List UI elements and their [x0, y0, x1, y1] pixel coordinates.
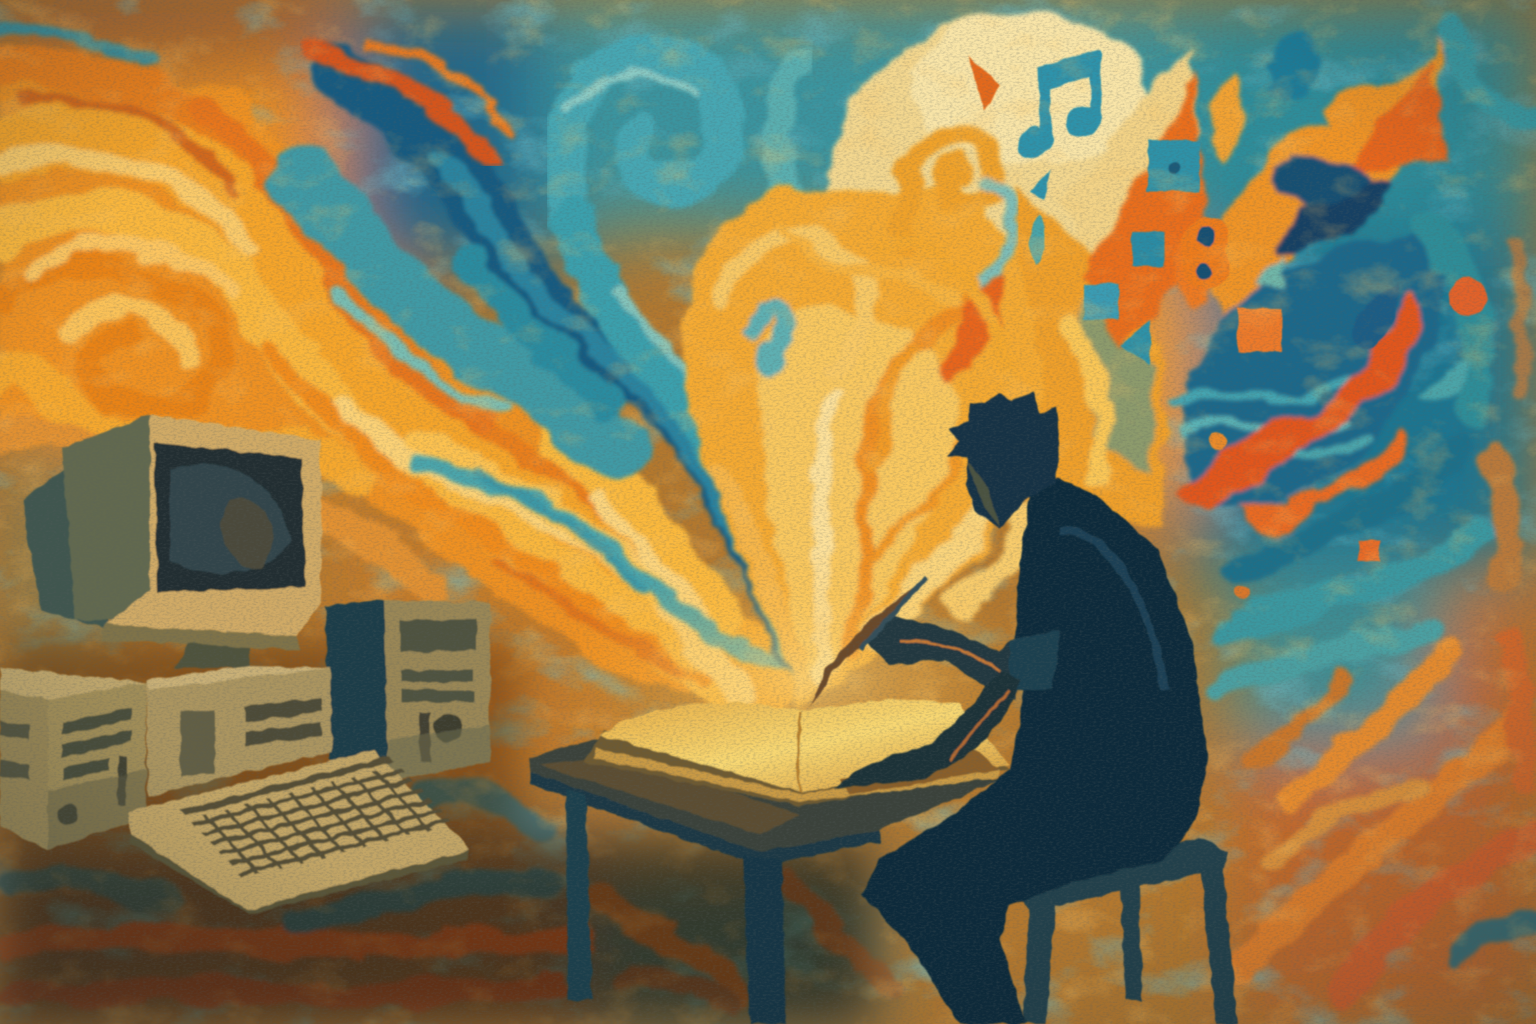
lower arm on book [835, 670, 1020, 790]
table [528, 738, 1000, 1024]
geometric squares and dots [1084, 140, 1487, 599]
teal swirl [559, 55, 800, 640]
middle base unit [146, 666, 332, 796]
floor strokes [10, 640, 1530, 1000]
head with spiky hair [948, 392, 1060, 528]
open book [584, 700, 1010, 806]
icon: music note [968, 50, 1102, 265]
left flames: orange and yellow swirling bands [0, 68, 795, 705]
dark floor shadow [0, 640, 870, 1024]
orange spiral under the moon [880, 134, 1012, 380]
stool [1010, 838, 1238, 1024]
monitor [22, 414, 322, 668]
central flame rising from the book [682, 185, 1170, 710]
teal waves crossing the flames [0, 28, 800, 665]
right abstract waves [1080, 30, 1530, 690]
pale moon glow [830, 15, 1200, 360]
glow around book [560, 550, 1040, 810]
red-orange streak at upper centre [310, 40, 510, 160]
quill [810, 578, 926, 708]
arm with quill [865, 615, 1032, 700]
computers group [0, 414, 490, 914]
keyboard [128, 750, 470, 914]
left base unit [0, 668, 146, 850]
torso and legs [862, 478, 1208, 1024]
tower at right [325, 600, 490, 782]
person silhouette [810, 392, 1208, 1024]
